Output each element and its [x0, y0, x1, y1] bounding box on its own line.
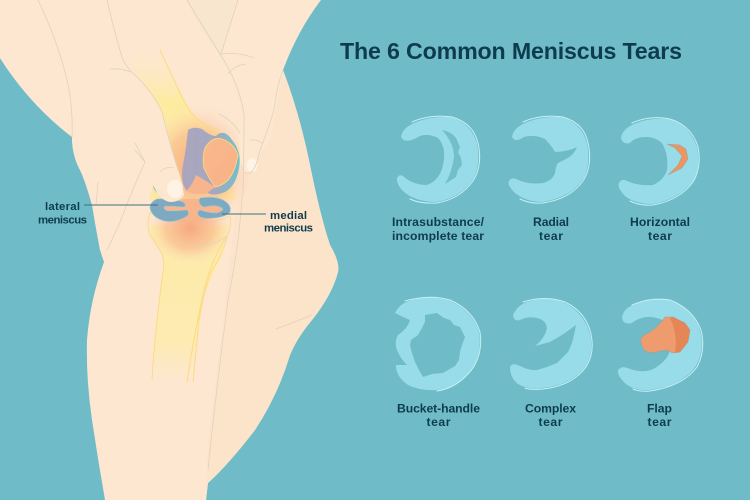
- label: tear: [539, 229, 563, 243]
- panel: horizontal tear: [619, 118, 699, 243]
- orange tear: [667, 144, 688, 175]
- title: The 6 Common Meniscus Tears: [340, 38, 682, 64]
- fingernail: [246, 158, 258, 172]
- right fingers: [214, 54, 283, 173]
- label: Flap: [647, 402, 672, 416]
- label: Bucket-handle: [397, 402, 480, 416]
- label: lateral meniscus: meniscus: [38, 214, 87, 226]
- medial meniscus pointer: [222, 213, 266, 215]
- femoral cartilage: [182, 128, 240, 194]
- lower knee glow: [146, 190, 234, 266]
- label: lateral meniscus: lateral: [45, 201, 80, 213]
- label: medial meniscus: medial: [270, 210, 307, 222]
- meniscus shape: [619, 119, 698, 204]
- label: tear: [648, 229, 672, 243]
- label: Horizontal: [630, 215, 690, 229]
- meniscus shape: [510, 299, 591, 388]
- leg silhouette: [0, 0, 338, 500]
- flap fold: [670, 317, 690, 353]
- orange flap: [641, 317, 690, 353]
- label: Complex: [525, 402, 576, 416]
- thumbnail: [167, 180, 183, 198]
- medial meniscus: [198, 197, 230, 218]
- panel: radial tear: [509, 116, 590, 243]
- panel: bucket-handle tear: [395, 297, 481, 429]
- label: Radial: [533, 215, 569, 229]
- label: tear: [648, 415, 672, 429]
- label: tear: [538, 415, 563, 429]
- femur outline: [160, 50, 220, 130]
- lateral meniscus pointer: [84, 204, 158, 206]
- knee inflammation glow: [140, 102, 256, 234]
- small left cartilage: [153, 186, 166, 196]
- shin bones: [148, 212, 230, 382]
- joint centre: [162, 199, 224, 221]
- label: Intrasubstance/: [392, 215, 485, 229]
- right thigh shade: [206, 70, 338, 500]
- label: incomplete tear: [392, 229, 484, 243]
- meniscus shape: [618, 299, 702, 390]
- panel: intrasubstance tear: [392, 116, 485, 243]
- panel: flap tear: [618, 299, 703, 429]
- label: medial meniscus: meniscus: [264, 222, 313, 234]
- tear: [442, 130, 462, 184]
- label: tear: [426, 415, 451, 429]
- meniscus shape: [395, 298, 480, 390]
- upper shade: [187, 0, 238, 54]
- meniscus shape: [397, 117, 478, 202]
- lateral meniscus: [150, 199, 188, 221]
- illustration: leg with knee anatomy: [0, 0, 338, 500]
- patella: [203, 138, 238, 187]
- meniscus shape: [509, 117, 588, 202]
- hand over knee: [0, 0, 184, 232]
- femur: [130, 50, 236, 200]
- inner condyle: [186, 175, 215, 194]
- panel: complex tear: [510, 298, 592, 429]
- contour lines: [38, 0, 312, 470]
